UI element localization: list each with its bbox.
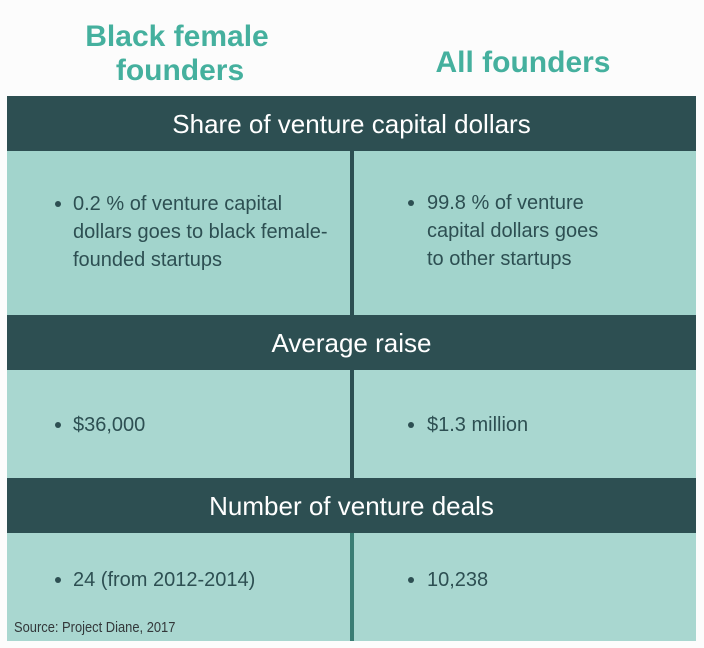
column heading: Black female founders: founders (116, 54, 244, 87)
column divider: share (350, 151, 354, 315)
text: black female deals: 24 (from 2012-2014) (73, 569, 255, 591)
section header: number of deals: Number of venture deals (209, 491, 494, 521)
bullet marker (55, 201, 61, 207)
section header: share: Share of venture capital dollars (172, 109, 531, 139)
text: black female share (73, 193, 328, 271)
column divider: deals (350, 533, 354, 641)
bullet marker (55, 422, 61, 428)
section header: share (7, 96, 696, 151)
bullet marker (408, 577, 414, 583)
text: all founders share: to other startups (427, 248, 572, 270)
panel: deals right (354, 533, 696, 641)
panel: deals left (7, 533, 350, 641)
text: all founders share: capital dollars goes (427, 220, 598, 242)
panel: raise right (354, 370, 696, 478)
column divider: raise (350, 370, 354, 478)
text: all founders share: 99.8 % of venture (427, 192, 584, 214)
text: black female share: founded startups (73, 249, 222, 271)
panel: raise left (7, 370, 350, 478)
bullet marker (408, 422, 414, 428)
text: black female share: 0.2 % of venture capital (73, 193, 282, 215)
column heading: Black female founders: Black female (85, 20, 269, 53)
text: all founders raise: $1.3 million (427, 414, 528, 436)
bullet marker (408, 200, 414, 206)
text: all founders deals: 10,238 (427, 569, 488, 591)
source note: Source: Project Diane, 2017 (14, 620, 175, 636)
text: all founders share (427, 192, 598, 270)
text: black female share: dollars goes to black female- (73, 221, 328, 243)
bullet marker (55, 577, 61, 583)
column heading: Black female founders (85, 20, 269, 87)
section header: average raise (7, 315, 696, 370)
panel: share left (7, 151, 350, 315)
column heading: All founders: All founders (435, 46, 610, 79)
section header: average raise: Average raise (272, 328, 431, 358)
panel: share right (354, 151, 696, 315)
section header: number of deals (7, 478, 696, 533)
text: black female raise: $36,000 (73, 414, 145, 436)
